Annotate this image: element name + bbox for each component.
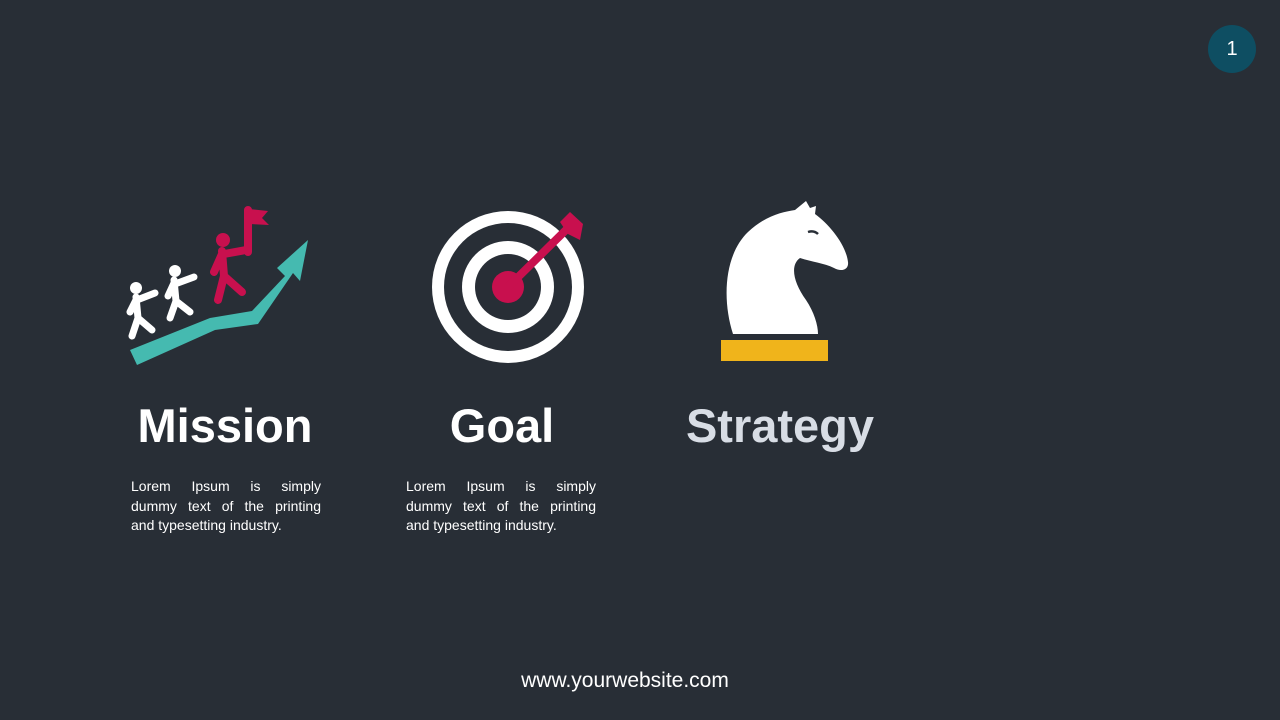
icon: goal target [432, 211, 584, 363]
text: goal description [406, 478, 596, 533]
text: goal description: and typesetting industry. [406, 517, 557, 533]
text: goal description: Lorem Ipsum is simply [406, 478, 596, 494]
text: mission description: and typesetting industry. [131, 517, 282, 533]
heading: Goal: Goal [450, 399, 554, 452]
text: mission description [131, 478, 321, 533]
heading: Mission: Mission [138, 399, 312, 452]
icon: strategy knight [721, 201, 848, 361]
heading: Strategy: Strategy [686, 399, 874, 452]
icon: mission climbers on arrow [130, 209, 308, 365]
text: mission description: Lorem Ipsum is simply [131, 478, 321, 494]
footer website: www.yourwebsite.com [521, 669, 729, 692]
page number badge [1208, 25, 1256, 73]
page number badge: 1 [1226, 38, 1238, 60]
text: goal description: dummy text of the printing [406, 498, 596, 514]
text: mission description: dummy text of the printing [131, 498, 321, 514]
